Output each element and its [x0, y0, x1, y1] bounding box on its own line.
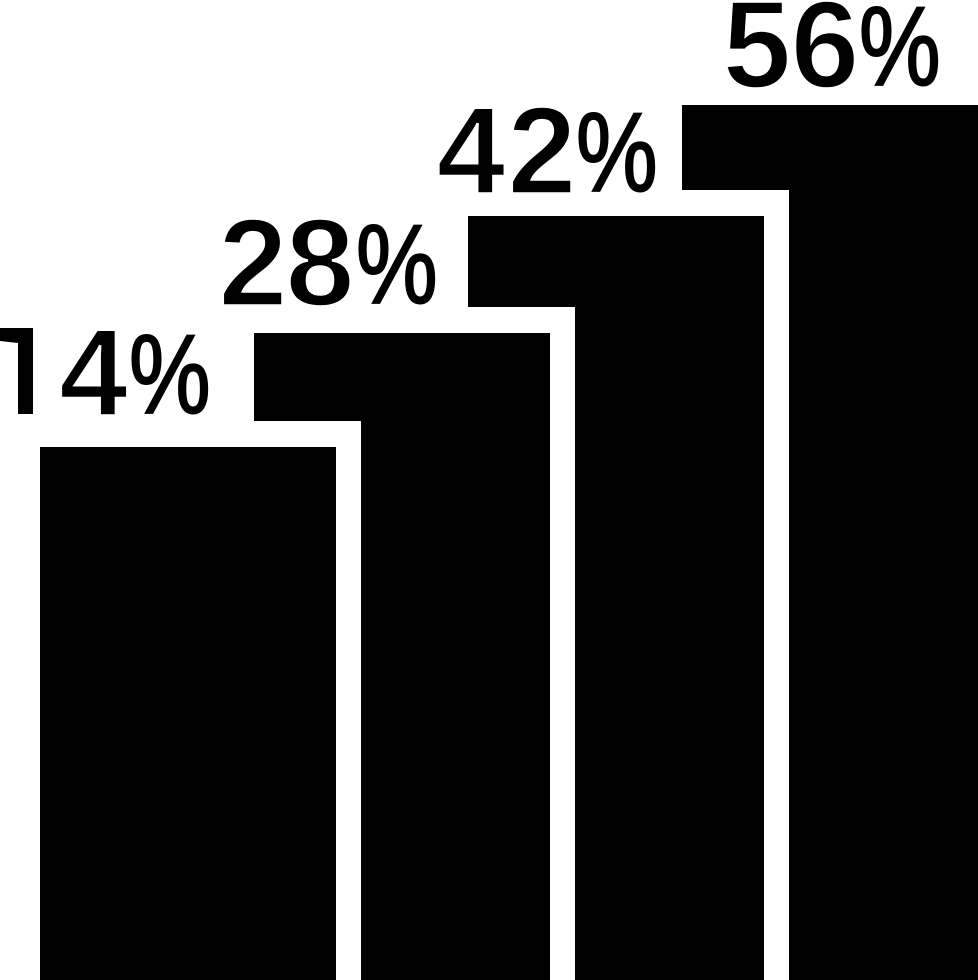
label: 28%: % — [356, 201, 438, 327]
label: 28% — [218, 194, 438, 332]
label: 14% — [0, 328, 208, 414]
label: 14%: % — [129, 311, 211, 437]
label: 28%: 28 — [218, 194, 354, 332]
bar: 14% — [40, 447, 336, 980]
label: 42%: 42 — [436, 82, 576, 220]
label: 42% — [436, 82, 658, 220]
label: 56% — [722, 0, 941, 114]
label: 14%: 4 — [59, 304, 128, 442]
bar: 42% — [468, 216, 764, 980]
bar: 28% — [254, 333, 550, 980]
label: 42%: % — [576, 89, 658, 215]
bar: 56% — [682, 105, 978, 980]
